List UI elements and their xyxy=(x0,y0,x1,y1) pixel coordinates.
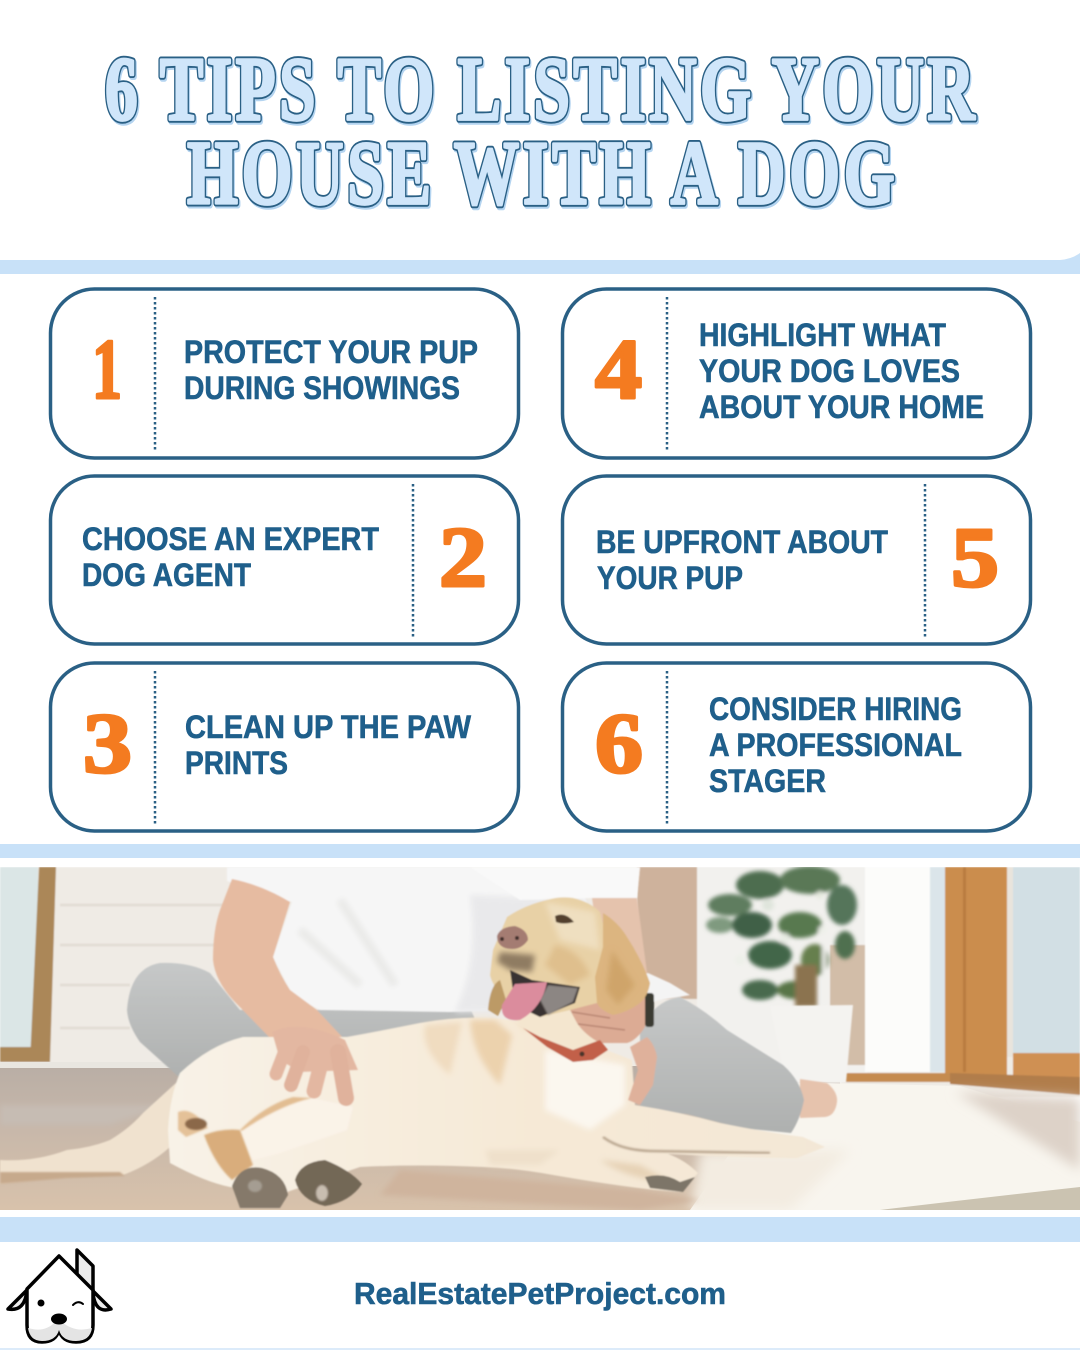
head shading xyxy=(497,902,600,985)
card 1: 1 xyxy=(92,321,122,417)
card 3 xyxy=(50,663,518,831)
card 1: PROTECT YOUR PUP xyxy=(184,334,478,370)
left jowl xyxy=(488,980,506,1016)
nose xyxy=(497,926,528,949)
mouth xyxy=(510,970,580,1017)
hand on dog xyxy=(273,1036,358,1072)
back paw left xyxy=(232,1167,288,1208)
card 2: DOG AGENT xyxy=(82,557,251,593)
card 4 xyxy=(562,289,1030,458)
bottom edge xyxy=(0,1348,1080,1350)
background wall and windows xyxy=(0,867,1080,1097)
logo: dog house xyxy=(8,1250,111,1342)
card 6: 6 xyxy=(595,695,643,791)
card 4: ABOUT YOUR HOME xyxy=(699,389,984,425)
dog fur shading xyxy=(424,1020,670,1182)
plant foliage xyxy=(706,866,857,1007)
card 4: YOUR DOG LOVES xyxy=(699,353,960,389)
lower band xyxy=(0,1217,1080,1242)
title: HOUSE WITH A DOG xyxy=(187,123,895,224)
card 6 xyxy=(562,663,1030,831)
card 2 xyxy=(50,476,518,644)
back paw right xyxy=(295,1160,362,1206)
dog head xyxy=(490,897,612,1017)
right leg xyxy=(640,997,804,1133)
leg shadow xyxy=(603,1137,770,1153)
right arm behind head xyxy=(592,898,648,980)
card 4: 4 xyxy=(595,321,642,417)
card 6: STAGER xyxy=(709,763,826,799)
dog tail xyxy=(0,1083,176,1175)
card 5: 5 xyxy=(951,509,999,605)
left knee xyxy=(127,963,480,1078)
ear xyxy=(595,913,650,1015)
title: 6 TIPS TO LISTING YOUR xyxy=(106,41,977,142)
card 1: DURING SHOWINGS xyxy=(184,370,460,406)
card 1 xyxy=(50,289,518,458)
card 6: A PROFESSIONAL xyxy=(709,727,962,763)
photo: man with labrador on floor xyxy=(0,866,1080,1210)
title: 6 TIPS TO LISTING YOUR xyxy=(105,39,975,140)
card 4: HIGHLIGHT WHAT xyxy=(699,317,946,353)
plant pot xyxy=(783,1004,854,1084)
front paw xyxy=(645,1175,695,1192)
hind leg xyxy=(178,1097,353,1180)
tongue xyxy=(502,982,547,1020)
card 5: BE UPFRONT ABOUT xyxy=(596,524,888,560)
title: 6 TIPS TO LISTING YOUR xyxy=(105,39,975,140)
eye xyxy=(555,914,574,924)
footer website: RealEstatePetProject.com xyxy=(354,1276,726,1311)
card 5 xyxy=(562,476,1030,644)
collar xyxy=(524,1028,608,1063)
foot xyxy=(800,1079,837,1118)
card 3: 3 xyxy=(83,695,132,791)
title xyxy=(105,39,977,226)
card 2: CHOOSE AN EXPERT xyxy=(82,521,379,557)
card 5: YOUR PUP xyxy=(597,560,743,596)
dog body xyxy=(168,1018,825,1192)
title: HOUSE WITH A DOG xyxy=(187,123,895,224)
floor xyxy=(0,1066,840,1210)
card 3: CLEAN UP THE PAW xyxy=(185,709,472,745)
shirt xyxy=(227,868,586,1013)
card 2: 2 xyxy=(439,509,487,605)
hand under jaw xyxy=(570,997,647,1043)
lower fingers on chest xyxy=(628,1037,657,1105)
header band xyxy=(0,253,1080,274)
card 6: CONSIDER HIRING xyxy=(709,691,962,727)
left arm xyxy=(213,879,345,1040)
title: HOUSE WITH A DOG xyxy=(188,125,896,226)
card 3: PRINTS xyxy=(185,745,288,781)
neck fur xyxy=(516,1010,596,1044)
middle band xyxy=(0,844,1080,858)
